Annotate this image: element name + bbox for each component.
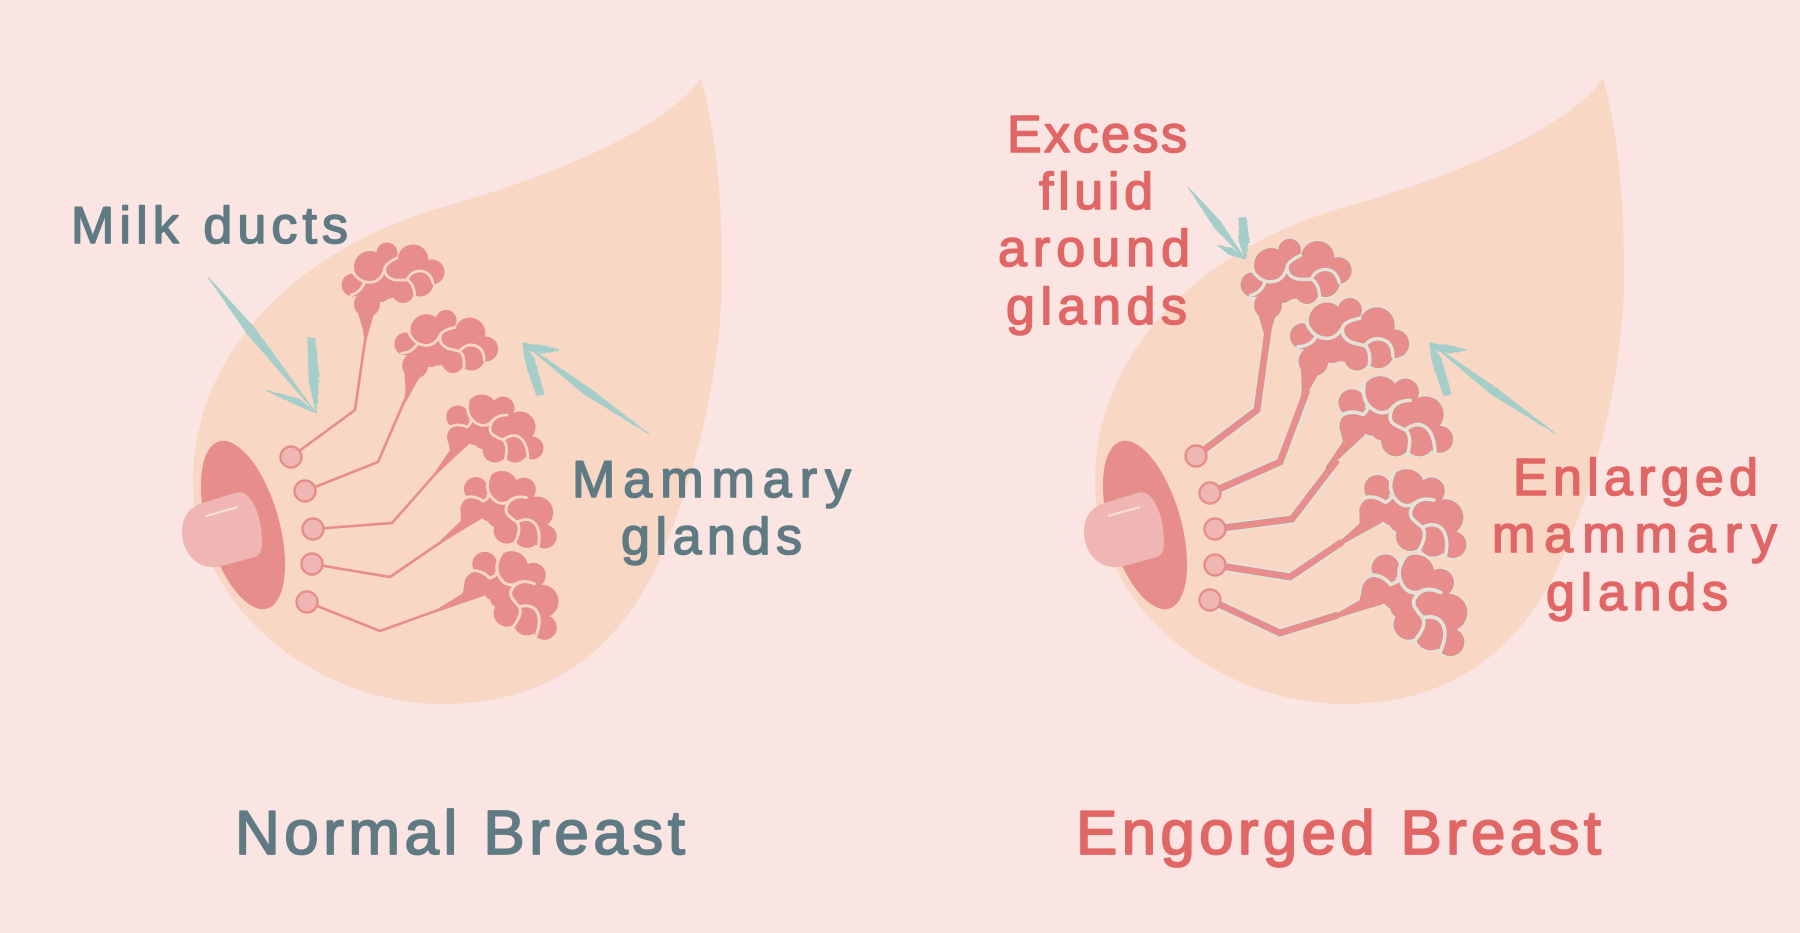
duct openings [280, 446, 324, 612]
label: excess fluid around glands: Excess [1007, 106, 1187, 164]
areola [1086, 431, 1204, 619]
title: engorged breast: Engorged Breast [1076, 799, 1601, 868]
areola [184, 431, 302, 619]
swollen milk ducts [1196, 330, 1342, 633]
label: excess fluid around glands: around [998, 220, 1190, 278]
label: milk ducts: Milk ducts [71, 197, 348, 255]
label: enlarged mammary glands: Enlarged [1513, 449, 1758, 507]
label: excess fluid around glands: glands [1006, 278, 1187, 336]
duct casing [1196, 345, 1338, 633]
label: excess fluid around glands [998, 106, 1190, 336]
duct openings [1186, 446, 1226, 610]
mammary glands [342, 242, 579, 658]
breast silhouette [1095, 78, 1624, 704]
nipple [182, 492, 262, 567]
label: mammary glands: Mammary [572, 451, 851, 509]
panel: engorged breast [998, 78, 1777, 868]
label: enlarged mammary glands: mammary [1492, 506, 1777, 564]
arrow: excess fluid [1188, 187, 1249, 259]
label: enlarged mammary glands: glands [1546, 564, 1728, 622]
nipple [1084, 492, 1164, 567]
enlarged mammary glands [1240, 239, 1492, 677]
label: excess fluid around glands: fluid [1039, 163, 1153, 221]
label: mammary glands: glands [621, 508, 802, 566]
milk ducts [291, 327, 445, 631]
title: normal breast: Normal Breast [235, 799, 685, 868]
arrow: enlarged glands [1430, 343, 1556, 434]
label: mammary glands [572, 451, 851, 566]
panel: normal breast [71, 78, 851, 868]
arrow: milk ducts [208, 277, 319, 413]
breast silhouette [193, 78, 722, 704]
arrow: mammary glands [523, 343, 649, 434]
label: enlarged mammary glands [1492, 449, 1777, 622]
